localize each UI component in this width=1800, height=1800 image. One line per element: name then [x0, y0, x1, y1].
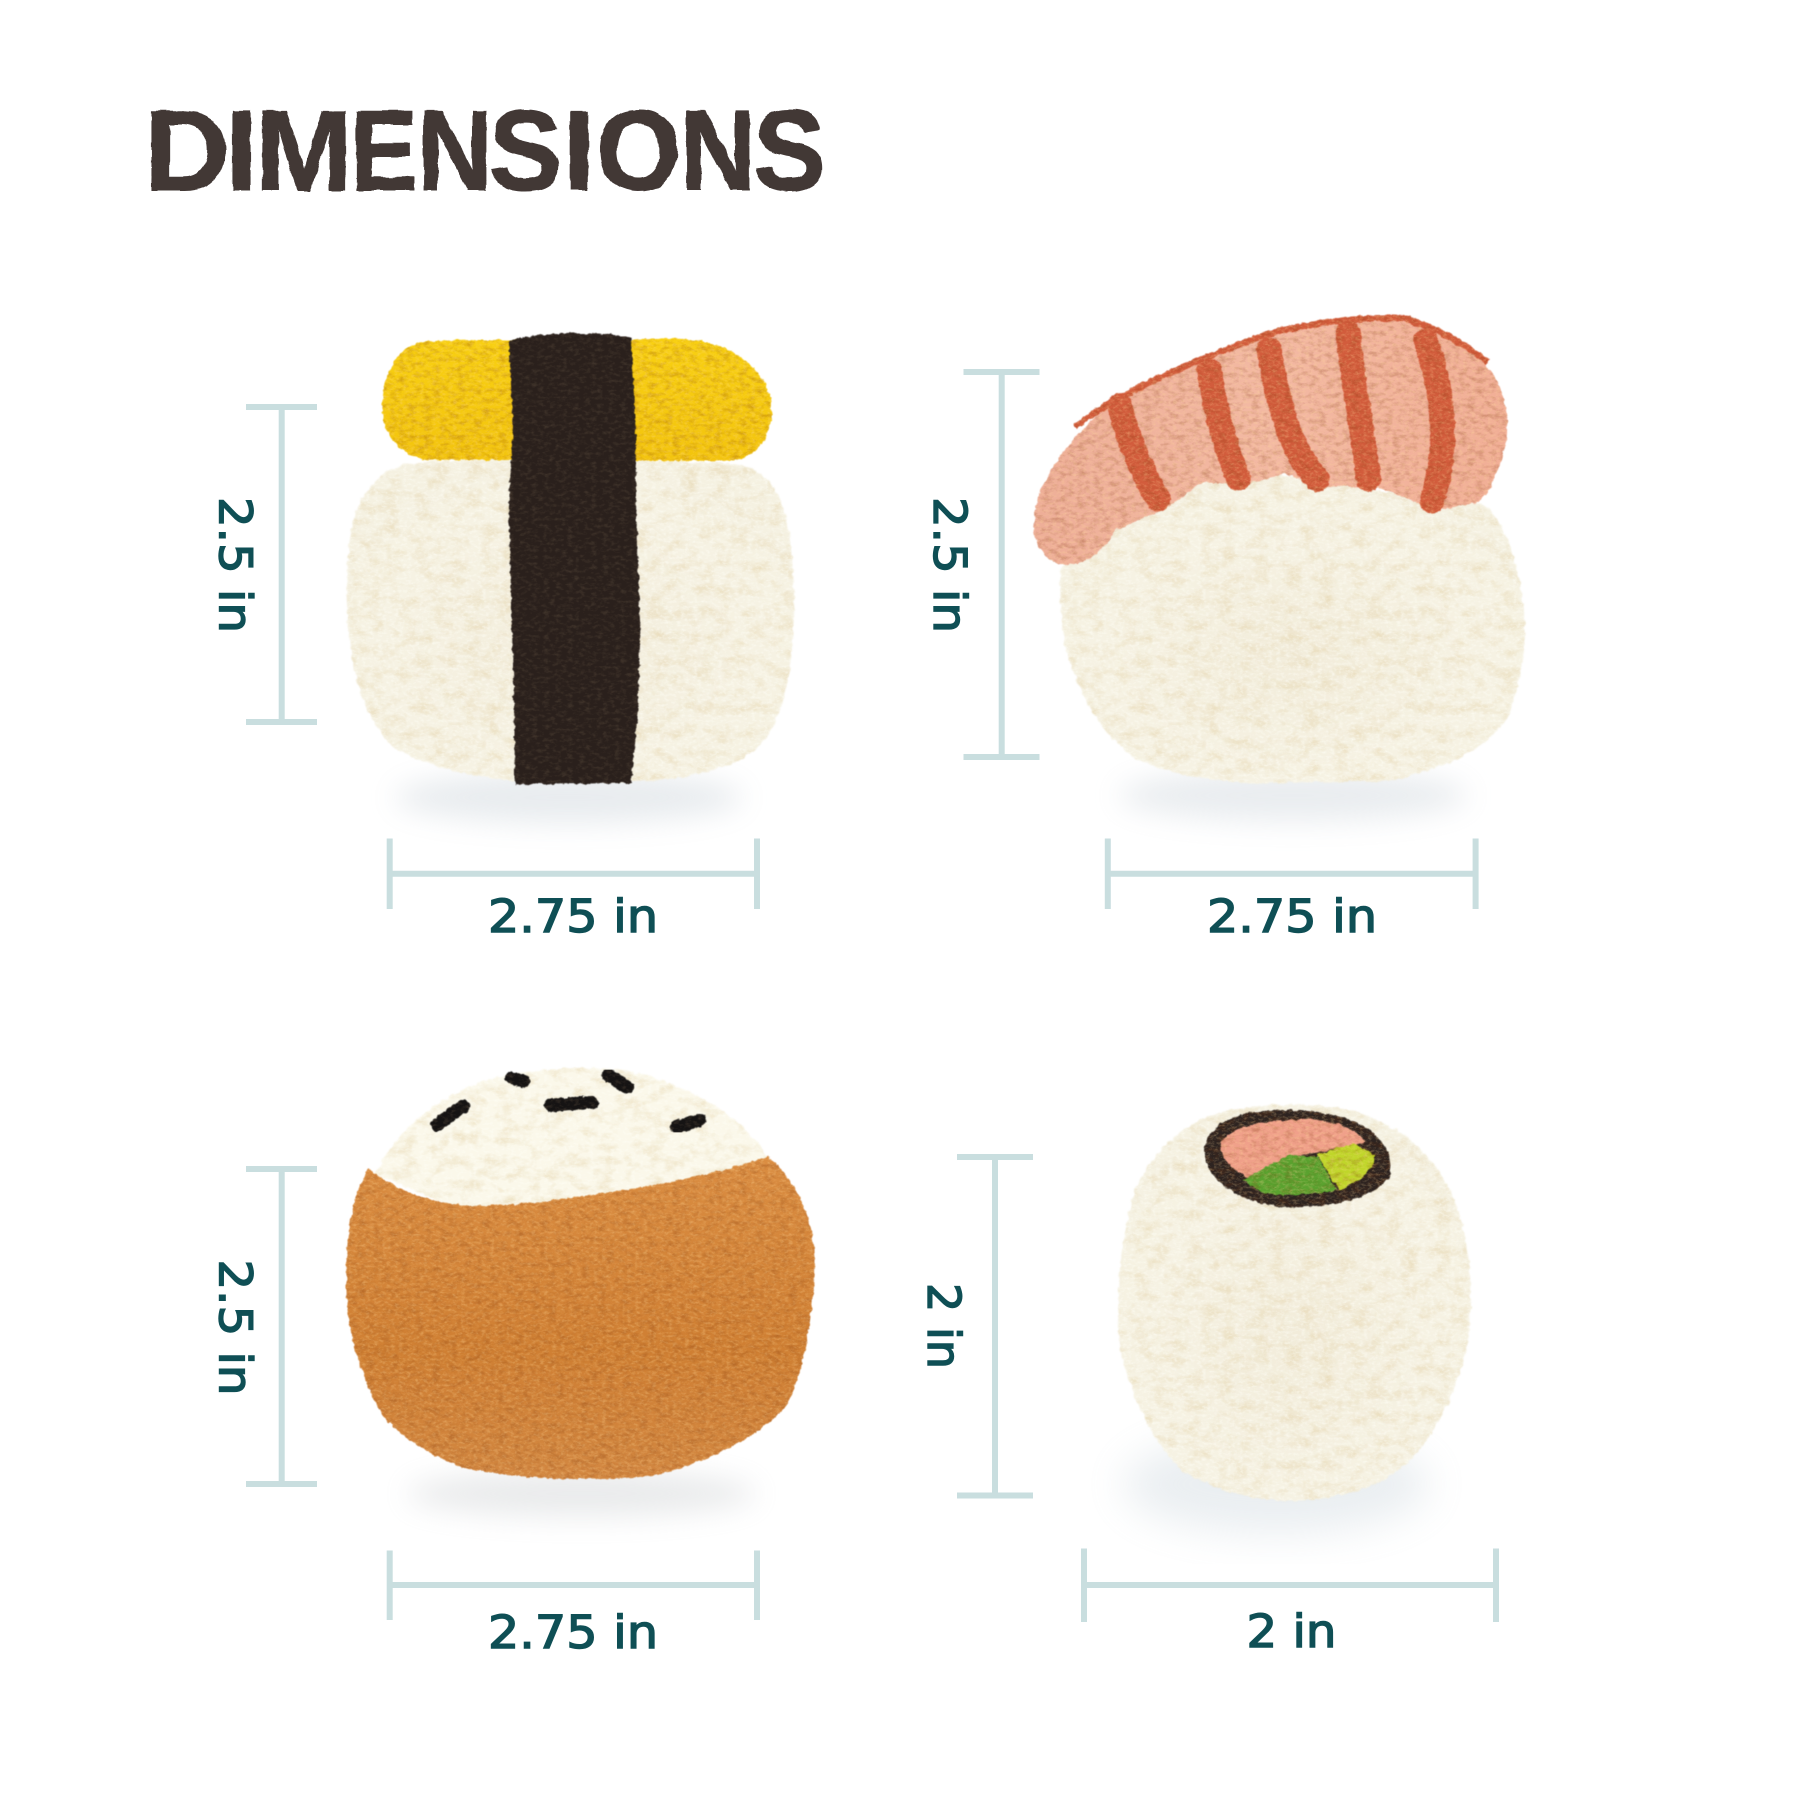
title: M: [255, 88, 353, 215]
title: S: [753, 88, 826, 215]
photo: inari: [346, 1068, 814, 1516]
title: S: [489, 88, 562, 215]
photo: maki roll: [1118, 1105, 1471, 1534]
height bracket: [964, 372, 1040, 757]
height bracket: [246, 1169, 317, 1484]
title: I: [225, 88, 258, 215]
height bracket: [246, 407, 317, 722]
width label: 2 in: [1246, 1605, 1336, 1658]
height label: 2.5 in: [923, 497, 976, 633]
maki filling: [1204, 1110, 1391, 1207]
width bracket: [1108, 838, 1476, 909]
panel: inari: [208, 1068, 814, 1659]
title: D: [144, 88, 230, 215]
shrimp body: [1034, 316, 1507, 565]
photo: tamago nigiri: [347, 333, 794, 823]
width bracket: [1084, 1548, 1496, 1622]
height label: 2.5 in: [208, 1260, 262, 1396]
panel: shrimp nigiri: [923, 316, 1525, 943]
title: I: [563, 88, 595, 215]
title: O: [596, 88, 681, 215]
sesame seeds: [437, 1075, 700, 1127]
height label: 2.5 in: [208, 497, 262, 633]
photo: shrimp nigiri: [1034, 316, 1525, 821]
title: E: [350, 88, 418, 215]
width label: 2.75 in: [488, 890, 658, 943]
panel: maki roll: [917, 1105, 1496, 1658]
title: N: [417, 88, 493, 215]
panel: tamago nigiri: [208, 333, 794, 943]
width bracket: [390, 838, 757, 909]
title: [144, 88, 826, 215]
height label: 2 in: [917, 1283, 970, 1369]
title: N: [680, 88, 756, 215]
width label: 2.75 in: [488, 1606, 658, 1659]
height bracket: [957, 1157, 1033, 1496]
width label: 2.75 in: [1207, 890, 1377, 943]
width bracket: [390, 1550, 757, 1620]
